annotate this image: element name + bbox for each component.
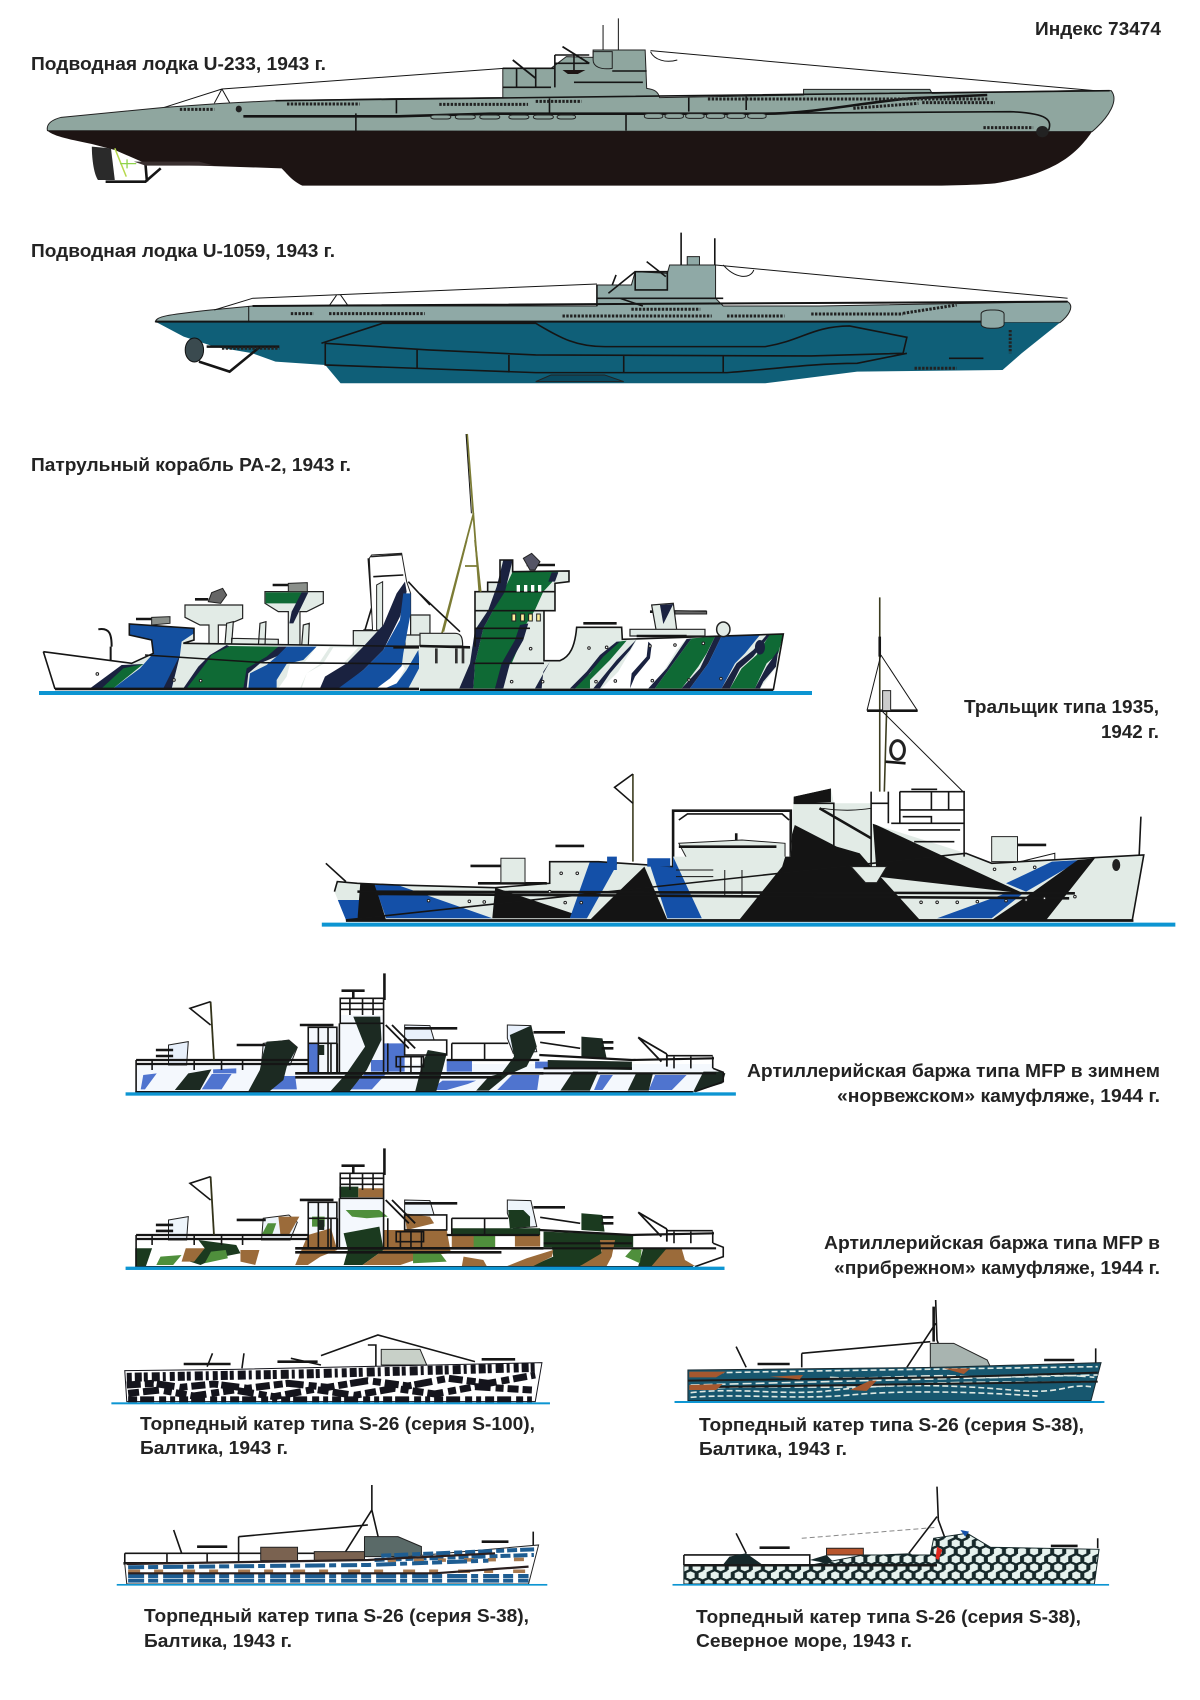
torpedo boat S-100	[111, 1335, 550, 1404]
title: S-26 series S-38 Baltic, top right: Торпедный катер типа S-26 (серия S-38),	[699, 1415, 1084, 1435]
minesweeper type 1935	[322, 597, 1175, 927]
waterline	[39, 691, 812, 695]
mast and rigging	[684, 1487, 1098, 1565]
title: S-26 series S-100: Торпедный катер типа S-26 (серия S-100),	[140, 1414, 535, 1434]
camouflaged hull	[688, 1363, 1101, 1401]
title: S-26 series S-38 Baltic, top right: Балтика, 1943 г.	[699, 1439, 847, 1459]
patrol ship PA-2	[39, 434, 812, 695]
aft part of PA-2	[43, 553, 430, 689]
title: MFP coastal: Артиллерийская баржа типа MFP в	[824, 1233, 1160, 1253]
gun tubs	[185, 605, 243, 644]
title: PA-2: Патрульный корабль PA-2, 1943 г.	[31, 455, 351, 475]
submarine U-233	[47, 18, 1114, 186]
structure	[135, 1148, 723, 1267]
title: MFP winter: Артиллерийская баржа типа MFP в зимнем	[747, 1061, 1160, 1081]
index number: Индекс 73474	[1035, 19, 1161, 39]
rudder and propeller	[92, 147, 214, 182]
waterline	[111, 1402, 550, 1404]
superstructure	[207, 1335, 475, 1368]
rudder and propeller	[185, 338, 279, 372]
title: S-26 series S-38 Baltic, bottom left	[144, 1606, 529, 1651]
torpedo boat S-38 North Sea	[673, 1487, 1109, 1586]
title: S-26 series S-38 North Sea: Торпедный катер типа S-26 (серия S-38),	[696, 1607, 1081, 1627]
hull upper grey-green	[155, 265, 1071, 323]
title: S-26 series S-38 North Sea	[696, 1607, 1081, 1651]
structure	[135, 973, 723, 1092]
portholes	[429, 867, 1075, 903]
title: MFP coastal: «прибрежном» камуфляже, 1944 г.	[834, 1258, 1160, 1278]
mast and rigging	[125, 1485, 533, 1563]
title: S-26 series S-38 Baltic, top right	[699, 1415, 1084, 1459]
title: MFP winter	[747, 1061, 1160, 1106]
camouflaged hull	[125, 1363, 542, 1402]
title: U-233: Подводная лодка U-233, 1943 г.	[31, 54, 326, 74]
camouflaged hull	[684, 1533, 1099, 1584]
camouflage	[136, 1015, 725, 1092]
title: S-26 series S-38 Baltic, bottom left: Торпедный катер типа S-26 (серия S-38),	[144, 1606, 529, 1626]
funnel	[369, 553, 411, 647]
title: S-26 series S-100	[140, 1414, 535, 1458]
camouflaged hull	[323, 783, 1150, 923]
waterline	[675, 1401, 1104, 1403]
waterline	[322, 923, 1175, 927]
hull and bridge base	[419, 560, 783, 690]
title: U-1059: Подводная лодка U-1059, 1943 г.	[31, 241, 335, 261]
camouflaged hull	[125, 1545, 539, 1584]
lifeboat frame	[673, 811, 791, 877]
waterline	[117, 1584, 547, 1586]
waterline	[673, 1584, 1109, 1586]
artillery barge MFP, coastal camouflage	[126, 1148, 725, 1270]
submarine U-1059	[155, 233, 1071, 383]
title: S-26 series S-100: Балтика, 1943 г.	[140, 1438, 288, 1458]
forward part of PA-2	[419, 540, 783, 690]
torpedo boat S-38 Baltic, top right	[675, 1300, 1104, 1403]
title: MFP winter: «норвежском» камуфляже, 1944 г.	[837, 1086, 1160, 1106]
title: S-26 series S-38 Baltic, bottom left: Балтика, 1943 г.	[144, 1631, 292, 1651]
trawler superstructure	[334, 789, 1144, 921]
mast and rigging	[736, 1300, 1096, 1367]
camouflage	[135, 1187, 724, 1267]
bridge outline	[473, 560, 783, 690]
title: trawler: Тральщик типа 1935,	[964, 697, 1159, 717]
waterline	[126, 1092, 736, 1096]
title: trawler: 1942 г.	[1101, 722, 1159, 742]
title: S-26 series S-38 North Sea: Северное море, 1943 г.	[696, 1631, 912, 1651]
hull lower teal	[155, 322, 1060, 383]
hull lower dark	[47, 131, 1092, 186]
artillery barge MFP, Norwegian winter camouflage	[126, 973, 736, 1096]
mast	[442, 434, 479, 633]
title: MFP coastal	[824, 1233, 1160, 1278]
hull base	[43, 624, 430, 689]
title: trawler	[964, 697, 1159, 742]
waterline	[126, 1267, 725, 1270]
guns	[630, 603, 705, 636]
torpedo boat S-38 Baltic, bottom left	[117, 1485, 547, 1586]
mast and flag	[633, 597, 887, 862]
hull upper grey	[47, 50, 1114, 132]
